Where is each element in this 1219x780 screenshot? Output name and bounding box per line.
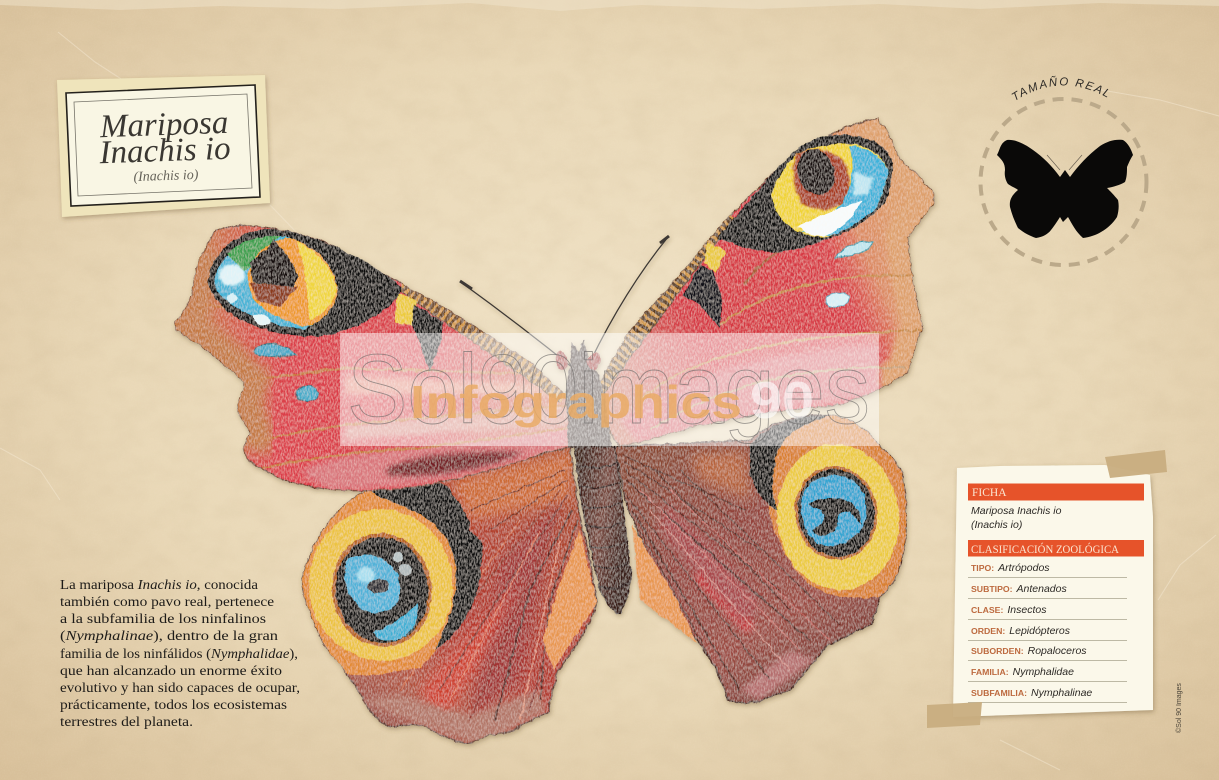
title text — [97, 105, 232, 186]
header: ficha: FICHA — [972, 487, 1007, 499]
intro text block: que han alcanzado un enorme éxito — [60, 663, 282, 678]
intro text block: a la subfamilia de los ninfalinos — [60, 611, 266, 626]
title text: Inachis io — [98, 131, 231, 171]
left forewing blue spots — [253, 343, 297, 357]
label: tamaño real: TAMAÑO REAL — [1012, 76, 1108, 100]
intro text block: evolutivo y han sido capaces de ocupar, — [60, 680, 300, 695]
abdomen — [575, 447, 631, 614]
body — [554, 340, 631, 614]
right forewing eye — [717, 135, 893, 252]
left forewing eye — [208, 229, 402, 336]
orange flap — [632, 525, 697, 643]
orange flap — [543, 530, 597, 670]
dashed circle — [980, 99, 1146, 265]
title text: Mariposa — [98, 105, 229, 145]
classification rows: ORDEN: Lepidópteros — [971, 621, 1071, 638]
watermark: Sol90images — [347, 334, 870, 444]
right forewing — [590, 119, 934, 447]
butterfly illustration — [175, 119, 934, 745]
left hindwing — [297, 447, 597, 745]
antennae — [460, 236, 669, 372]
thorax and head — [566, 340, 612, 447]
watermark: 90 — [750, 372, 814, 430]
species name: Mariposa Inachis io — [971, 505, 1062, 517]
species name: (Inachis io) — [971, 519, 1022, 531]
header: ficha — [968, 484, 1144, 500]
intro text block: prácticamente, todos los ecosistemas — [60, 697, 287, 712]
intro text block: La mariposa Inachis io , conocida — [60, 577, 258, 592]
right forewing blue spots — [835, 242, 873, 258]
intro text block: (Nymphalinae ), dentro de la gran — [60, 628, 278, 644]
header: clasificación zoológica — [968, 540, 1144, 556]
tape bottom — [927, 702, 982, 728]
tape top — [1105, 450, 1167, 478]
title card — [57, 75, 270, 217]
intro text block: terrestres del planeta. — [60, 714, 193, 729]
right eyespot — [750, 415, 906, 598]
note paper — [953, 465, 1153, 717]
costa stripes — [403, 283, 565, 395]
classification rows: SUBTIPO: Antenados — [971, 579, 1067, 596]
fact sheet note — [953, 450, 1167, 717]
silhouette — [997, 140, 1133, 238]
classification rows: CLASE: Insectos — [971, 600, 1047, 617]
left forewing — [175, 226, 572, 491]
title text: (Inachis io) — [133, 168, 199, 185]
classification rows — [968, 558, 1127, 702]
classification rows: SUBFAMILIA: Nymphalinae — [971, 683, 1092, 700]
copyright: ©Sol 90 Images — [1175, 683, 1183, 733]
intro text block — [60, 577, 300, 729]
header: clasificación zoológica: CLASIFICACIÓN ZOOLÓGICA — [971, 542, 1120, 556]
classification rows: FAMILIA: Nymphalidae — [971, 662, 1074, 679]
left eyespot — [297, 483, 482, 675]
right hindwing — [615, 415, 906, 704]
yellow and black patches — [395, 294, 417, 327]
watermark: Infographics — [410, 376, 742, 428]
classification rows: TIPO: Artrópodos — [971, 558, 1050, 575]
classification rows: SUBORDEN: Ropaloceros — [971, 641, 1087, 658]
intro text block: también como pavo real, pertenece — [60, 594, 274, 609]
actual size badge — [978, 76, 1148, 267]
species name — [971, 505, 1062, 531]
intro text block: familia de los ninfálidos ( Nymphalidae ), — [60, 646, 298, 662]
